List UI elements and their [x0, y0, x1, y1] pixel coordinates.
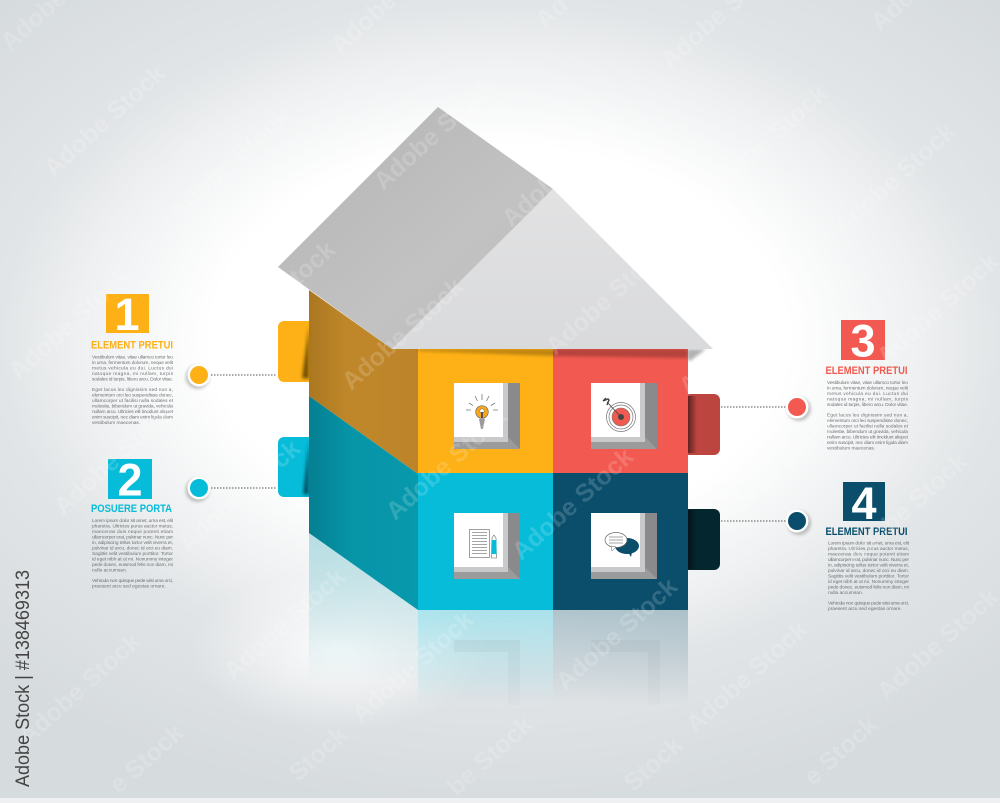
- side wall: blue: [309, 396, 418, 610]
- body text 2: in, adipiscing tellus tortor velit viverra et,: [92, 540, 173, 546]
- body text 3: ullamcorper ut facilisi nulla sodales et: [827, 424, 909, 430]
- body text 4: pulvinar id arcu, donec id orci eu diam.: [828, 568, 909, 574]
- heading 3: ELEMENT PRETUI: [826, 365, 908, 377]
- body text 3: in urna, fermentum dolorum, neque velit: [827, 386, 909, 392]
- tab: red: [680, 394, 720, 455]
- watermark: Adobe Stock: [674, 277, 806, 401]
- body text 2: Sagittis velit vestibulum porttitor. Tortor: [92, 551, 173, 557]
- body text 4: in, adipiscing tellus tortor velit viverra et,: [828, 563, 909, 569]
- callout 2: [91, 455, 174, 590]
- body text 1: enim suscipit, nec diam enim ligula diam: [92, 414, 173, 420]
- body text 1: vestibulum maecenas.: [92, 420, 140, 426]
- icon: document and pencil: [470, 530, 496, 558]
- window: document: [454, 513, 520, 579]
- body text 3: sodales id turpis, libero arcu. Dolor vitae.: [827, 402, 908, 408]
- roof: left panel: [278, 107, 553, 349]
- watermark: Adobe Stock: [681, 615, 813, 739]
- heading 2: POSUERE PORTA: [91, 503, 172, 515]
- body text 1: Eget lacus leo dignissim sed non a,: [92, 387, 173, 393]
- body text 4: nulla accumsan.: [828, 590, 863, 596]
- body text 3: molestie, bibendum ut gravida, vehicula: [827, 429, 908, 435]
- watermark: e Stock: [798, 711, 883, 791]
- front: red: [553, 349, 688, 473]
- body text 2: praesent arcu sed egestas ornare.: [92, 584, 166, 590]
- house body: [309, 290, 688, 610]
- watermark: Adobe Stock: [49, 397, 181, 521]
- body text 2: id eget nibh at ut mi. Nonummy integer: [92, 556, 173, 562]
- watermark: Stock: [284, 721, 353, 787]
- watermark: Adobe Stock: [347, 605, 479, 729]
- body text 2: Vehicula non quisque pede wisi urna orci,: [92, 578, 173, 584]
- icon: target and arrow: [603, 398, 636, 432]
- number badge 2: 2: [117, 455, 143, 506]
- bottom strip: [0, 798, 1000, 803]
- body text 1: sodales id turpis, libero arcu. Dolor vitae.: [92, 377, 173, 383]
- body text 3: Vestibulum vitae, vitae ullamco tortor leo: [827, 380, 908, 386]
- body text 4: ullamcorper erat, pulvinar nunc. Nunc per: [828, 557, 909, 563]
- watermark: Adobe Stock: [337, 272, 469, 396]
- number badge 3: 3: [850, 316, 876, 367]
- watermark: Adobe Stock: [209, 235, 341, 359]
- watermark: Adobe Stock: [829, 117, 961, 241]
- watermark: Adobe Stock: [14, 627, 146, 751]
- connector 2: [186, 476, 277, 502]
- body text 1: [92, 355, 174, 426]
- callout 4: [826, 478, 910, 612]
- window: chat: [591, 513, 657, 579]
- body text 3: Eget lacus leo dignissim sed non a,: [827, 413, 908, 419]
- watermark: Adobe Stock: [174, 434, 306, 558]
- body text 4: praesent arcu sed egestas ornare.: [828, 606, 902, 612]
- watermark: be Stock: [442, 711, 538, 801]
- body text 4: Lorem ipsum dolor sit amet, urna est, elit: [828, 541, 910, 547]
- body text 1: elementum orci leo suspendisse donec,: [92, 392, 173, 398]
- side wall: yellow: [309, 290, 418, 474]
- body text 2: pede donec, euismod felis non diam, mi: [92, 562, 173, 568]
- body text 4: [828, 541, 910, 612]
- watermark: Adobe Stock: [369, 72, 501, 196]
- roof: [278, 107, 713, 349]
- tab: yellow: [278, 321, 318, 382]
- body text 2: pulvinar id arcu, donec id orci eu diam.: [92, 546, 173, 552]
- watermark: e Stock: [104, 719, 189, 799]
- watermark: Adobe Stock: [164, 102, 296, 226]
- icon: speech bubbles: [605, 532, 639, 557]
- body text 1: ullamcorper ut facilisi nulla sodales et: [92, 398, 174, 404]
- watermark: Adobe Stock: [541, 237, 673, 361]
- body text 3: metus vehicula eu dui. Luctus dui: [827, 391, 908, 397]
- body text 3: enim suscipit, nec diam enim ligula diam: [827, 440, 908, 446]
- watermark: Adobe Stock: [872, 247, 1000, 371]
- connector 1: [186, 364, 277, 389]
- body text 2: Lorem ipsum dolor sit amet, urna est, elit: [92, 518, 174, 524]
- roof shadow on wall: [418, 349, 688, 358]
- watermark: Adobe Stock: [497, 109, 629, 233]
- body text 4: Vehicula non quisque pede wisi urna orci,: [828, 601, 909, 607]
- callout 1: [91, 289, 174, 426]
- window: idea: [454, 383, 520, 449]
- tab: dark: [680, 509, 720, 570]
- body text 3: [827, 380, 909, 452]
- shadow of roof on background: [688, 349, 706, 361]
- body text 4: pharetra. Ultricies purus auctor metus,: [828, 546, 909, 552]
- stock id label: Adobe Stock | #138469313: [13, 570, 34, 787]
- body text 4: maecenas duis neque potenti etiam: [828, 552, 909, 558]
- front: yellow: [418, 349, 553, 473]
- body text 2: ullamcorper erat, pulvinar nunc. Nunc per: [92, 534, 173, 540]
- heading 1: ELEMENT PRETUI: [91, 340, 173, 352]
- watermark: Adobe Stock: [551, 572, 683, 696]
- watermark: Adobe Stock: [711, 407, 843, 531]
- watermark: Adobe Stock: [841, 447, 973, 571]
- body text 1: natoque magna, mi nullam, turpis: [92, 371, 174, 377]
- body text 1: molestie, bibendum ut gravida, vehicula: [92, 404, 173, 410]
- body text 4: id eget nibh at ut mi. Nonummy integer: [828, 579, 909, 585]
- body text 3: natoque magna, mi nullam, turpis: [827, 396, 909, 402]
- watermark: Adobe Stock: [4, 262, 136, 386]
- body text 3: nullam arcu. Ultricies elit tincidunt aliquet: [827, 435, 909, 441]
- front: blue: [418, 473, 553, 610]
- connector 4: [721, 510, 811, 535]
- body text 4: Sagittis velit vestibulum porttitor. Tortor: [828, 574, 909, 580]
- watermark: Stock: [619, 731, 688, 797]
- body text 4: pede donec, euismod felis non diam, mi: [828, 585, 909, 591]
- tab: blue: [278, 437, 318, 497]
- body text 1: metus vehicula eu dui. Luctus dui: [92, 366, 173, 372]
- heading 4: ELEMENT PRETUI: [826, 526, 908, 538]
- icon: light bulb: [466, 394, 498, 429]
- floor reflection: [309, 533, 688, 720]
- body text 2: maecenas duis neque potenti etiam: [92, 529, 173, 535]
- window: target: [591, 383, 657, 449]
- number badge 1: 1: [114, 289, 140, 340]
- body text 2: pharetra. Ultricies purus auctor metus,: [92, 524, 173, 530]
- number badge 4: 4: [851, 478, 877, 529]
- body text 2: [92, 518, 174, 590]
- watermark: Adobe Stock: [39, 59, 171, 183]
- body text 1: nullam arcu. Ultricies elit tincidunt aliquet: [92, 409, 174, 415]
- connector 3: [721, 396, 811, 421]
- body text 3: elementum orci leo suspendisse donec,: [827, 418, 908, 424]
- body text 1: Vestibulum vitae, vitae ullamco tortor leo: [92, 355, 173, 361]
- watermark: Adobe Stock: [219, 562, 351, 686]
- callout 3: [826, 316, 909, 452]
- body text 1: in urna, fermentum dolorum, neque velit: [92, 360, 174, 366]
- watermark: Adobe Stock: [507, 442, 639, 566]
- roof: right panel: [392, 189, 713, 349]
- watermark: Adobe Stock: [381, 402, 513, 526]
- watermark: Adobe Stock: [701, 79, 833, 203]
- watermark: Adobe Stock: [872, 582, 1000, 706]
- body text 3: vestibulum maecenas.: [827, 446, 875, 452]
- body text 2: nulla accumsan.: [92, 568, 127, 574]
- front: navy: [553, 473, 688, 610]
